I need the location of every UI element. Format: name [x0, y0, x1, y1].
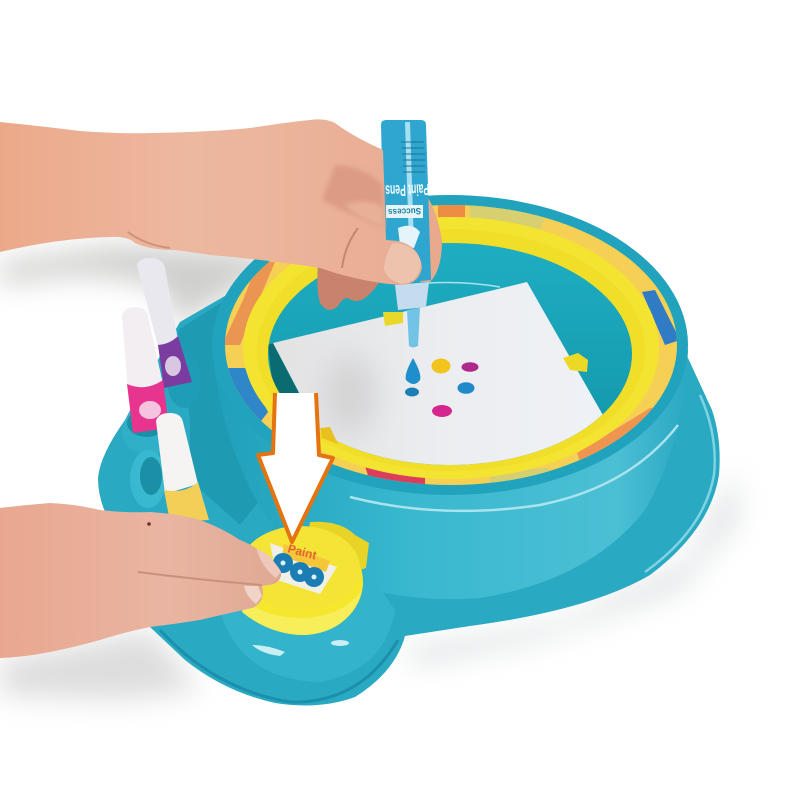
thumb crease — [342, 228, 358, 268]
finger hollow — [322, 165, 384, 228]
yellow inner ring — [243, 217, 659, 479]
decorated band — [220, 200, 690, 490]
paper shading — [324, 355, 376, 435]
button — [240, 522, 369, 635]
paint drops — [405, 358, 478, 417]
finger behind bottle — [420, 190, 442, 282]
shadow under toy — [400, 470, 738, 665]
bottle: blue paint pen: Success — [388, 206, 421, 217]
paper clips — [320, 312, 588, 444]
wrist crease — [128, 232, 170, 248]
left tray shading — [178, 300, 260, 525]
button logo — [273, 553, 324, 587]
cup: purple — [167, 352, 201, 408]
bottle cap — [395, 282, 429, 310]
lobe edge — [160, 630, 398, 702]
cup: pink — [122, 407, 178, 455]
hand: upper right hand — [0, 119, 422, 285]
lobe highlights — [252, 645, 285, 656]
arrow: press down — [258, 393, 333, 542]
finger knuckle — [345, 201, 384, 226]
flange highlight — [645, 395, 715, 572]
bottle small print — [401, 142, 425, 172]
button label — [270, 543, 337, 594]
toy base — [98, 293, 720, 705]
bottle: blue paint pen — [381, 120, 431, 348]
rim — [212, 195, 688, 495]
finger nails — [256, 548, 281, 578]
lower fingers of upper hand — [317, 258, 382, 310]
bottle highlight — [405, 122, 414, 245]
thumb nail — [384, 243, 421, 284]
illustration: paint spinner toy with hands — [0, 119, 745, 710]
hand: lower left hand — [0, 503, 281, 658]
bottle nozzle — [407, 308, 420, 348]
finger gap — [138, 572, 262, 585]
lobe well around button — [220, 560, 395, 682]
shadow under upper arm — [0, 245, 290, 325]
paper sheet — [268, 282, 602, 465]
bottle: purple — [137, 258, 192, 388]
bottle: pink — [122, 307, 169, 433]
paint bottles in holder — [122, 258, 209, 522]
bottle label: Paint Pens — [385, 180, 429, 199]
main bowl — [212, 195, 690, 599]
bottle: yellow — [156, 413, 209, 522]
inner well — [268, 243, 632, 465]
well reflection — [428, 282, 500, 287]
bowl highlight — [350, 425, 678, 511]
cup: empty — [130, 450, 166, 508]
button: Paint — [286, 541, 318, 562]
shadow under lower hand — [0, 630, 200, 700]
mole — [147, 522, 151, 526]
